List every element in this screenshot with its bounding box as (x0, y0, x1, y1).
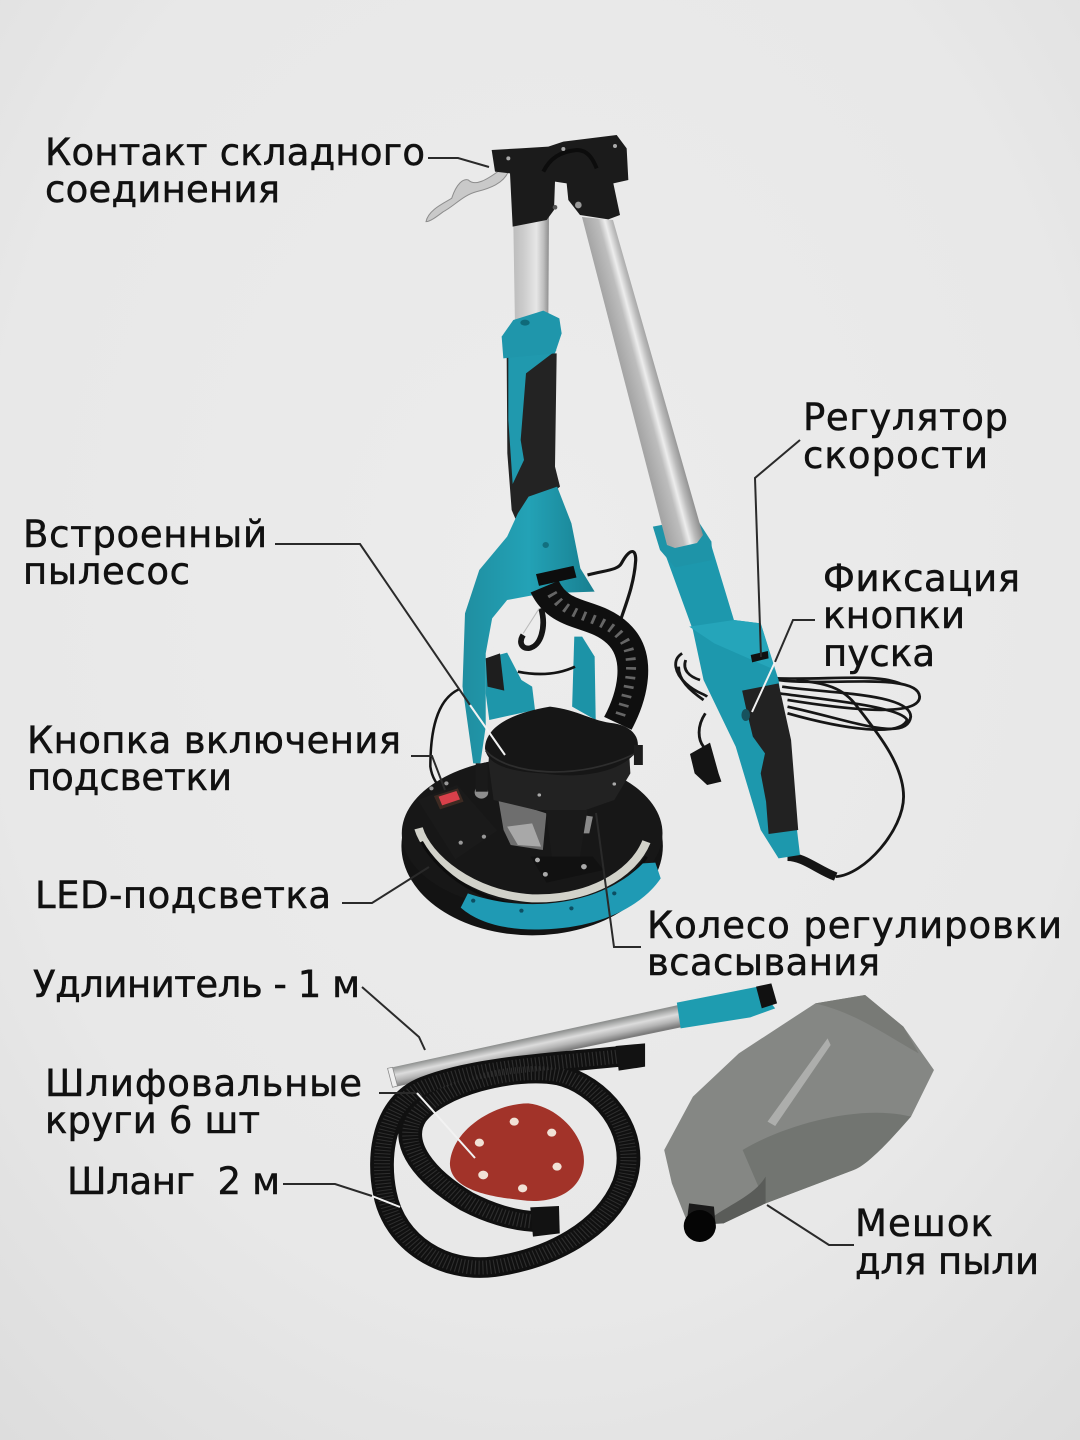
icon: black trigger grip (742, 683, 798, 834)
icon: rear cable (587, 552, 636, 640)
product: upper pole and head (426, 135, 628, 522)
product: sander lower part (401, 487, 920, 935)
callout: light button: Кнопка включения (27, 719, 401, 762)
icon: right pole (582, 217, 703, 548)
callout: suction wheel (596, 813, 1062, 984)
callout: sanding discs: круги 6 шт (45, 1099, 260, 1142)
callout: sanding discs: Шлифовальные (45, 1062, 362, 1105)
icon: dust bag rod (768, 1038, 831, 1126)
callout: folding joint contact (45, 131, 489, 211)
icon: hook (521, 608, 543, 648)
icon: dust bag nozzle (684, 1203, 716, 1242)
callout: light button: подсветки (27, 756, 232, 799)
callout: suction wheel: всасывания (647, 941, 880, 984)
icon: hose connector bottom (530, 1206, 560, 1237)
icon: left handle grip (507, 353, 560, 522)
icon: vacuum head body (489, 743, 630, 810)
icon: power cord strain relief (787, 857, 836, 877)
callout: built-in vacuum: Встроенный (23, 513, 267, 556)
callout: extension (33, 963, 425, 1050)
icon: motor column (546, 810, 587, 870)
callout: folding joint contact: соединения (45, 168, 280, 211)
icon: quick-release lever (426, 170, 508, 222)
callout: start button lock: Фиксация (823, 557, 1020, 600)
callout: hose: Шланг 2 м (67, 1160, 280, 1203)
icon: extension tube (388, 1005, 681, 1087)
icon: motor metal parts (498, 798, 546, 850)
icon: teal fork arm (462, 487, 595, 763)
icon: right handle collar (653, 518, 712, 567)
callout: speed regulator (755, 396, 1008, 657)
callout: LED light (35, 867, 429, 917)
icon: teal collar (502, 311, 562, 358)
callout: dust bag: Мешок (855, 1202, 993, 1245)
icon: switch housing (486, 653, 535, 720)
callout: speed regulator: Регулятор (803, 396, 1008, 439)
icon: left pole (513, 213, 549, 327)
icon: black folding head (492, 135, 628, 227)
callout: start button lock (752, 557, 1020, 712)
icon: vacuum head lid (485, 707, 638, 775)
icon: speed regulator slider (751, 651, 769, 662)
callout: dust bag (767, 1202, 1039, 1283)
icon: sanding disc base (401, 757, 663, 935)
callout: LED light: LED-подсветка (35, 874, 331, 917)
callout: folding joint contact: Контакт складного (45, 131, 425, 174)
icon: LED ring (419, 828, 646, 898)
icon: sanding sheet (450, 1103, 584, 1201)
icon: fork right leg (572, 637, 596, 720)
product: accessories (382, 983, 934, 1268)
icon: extension teal grip (677, 987, 775, 1028)
callout: light button (27, 719, 445, 799)
icon: extension black cap (756, 983, 777, 1008)
icon: right handle body (664, 543, 800, 858)
icon: right-hand cable loops (676, 653, 920, 877)
callout: start button lock: пуска (823, 632, 935, 675)
icon: plug (690, 743, 721, 785)
callout: start button lock: кнопки (823, 594, 965, 637)
callout: speed regulator: скорости (803, 434, 988, 477)
callout: built-in vacuum: пылесос (23, 550, 190, 593)
callout: built-in vacuum (23, 513, 505, 755)
callout: suction wheel: Колесо регулировки (647, 904, 1062, 947)
callout: hose (67, 1160, 400, 1207)
icon: dust bag (664, 995, 934, 1227)
icon: red lamp switch (434, 788, 464, 809)
icon: side cable (430, 689, 459, 793)
icon: black control plate (418, 785, 497, 859)
icon: teal bumper segment (461, 863, 661, 929)
callout: dust bag: для пыли (855, 1240, 1039, 1283)
icon: hose connector top (616, 1043, 645, 1071)
callout: sanding discs (45, 1062, 475, 1158)
callout: extension: Удлинитель - 1 м (33, 963, 360, 1006)
icon: corrugated hose (545, 587, 633, 723)
icon: coiled hose (382, 1056, 629, 1268)
